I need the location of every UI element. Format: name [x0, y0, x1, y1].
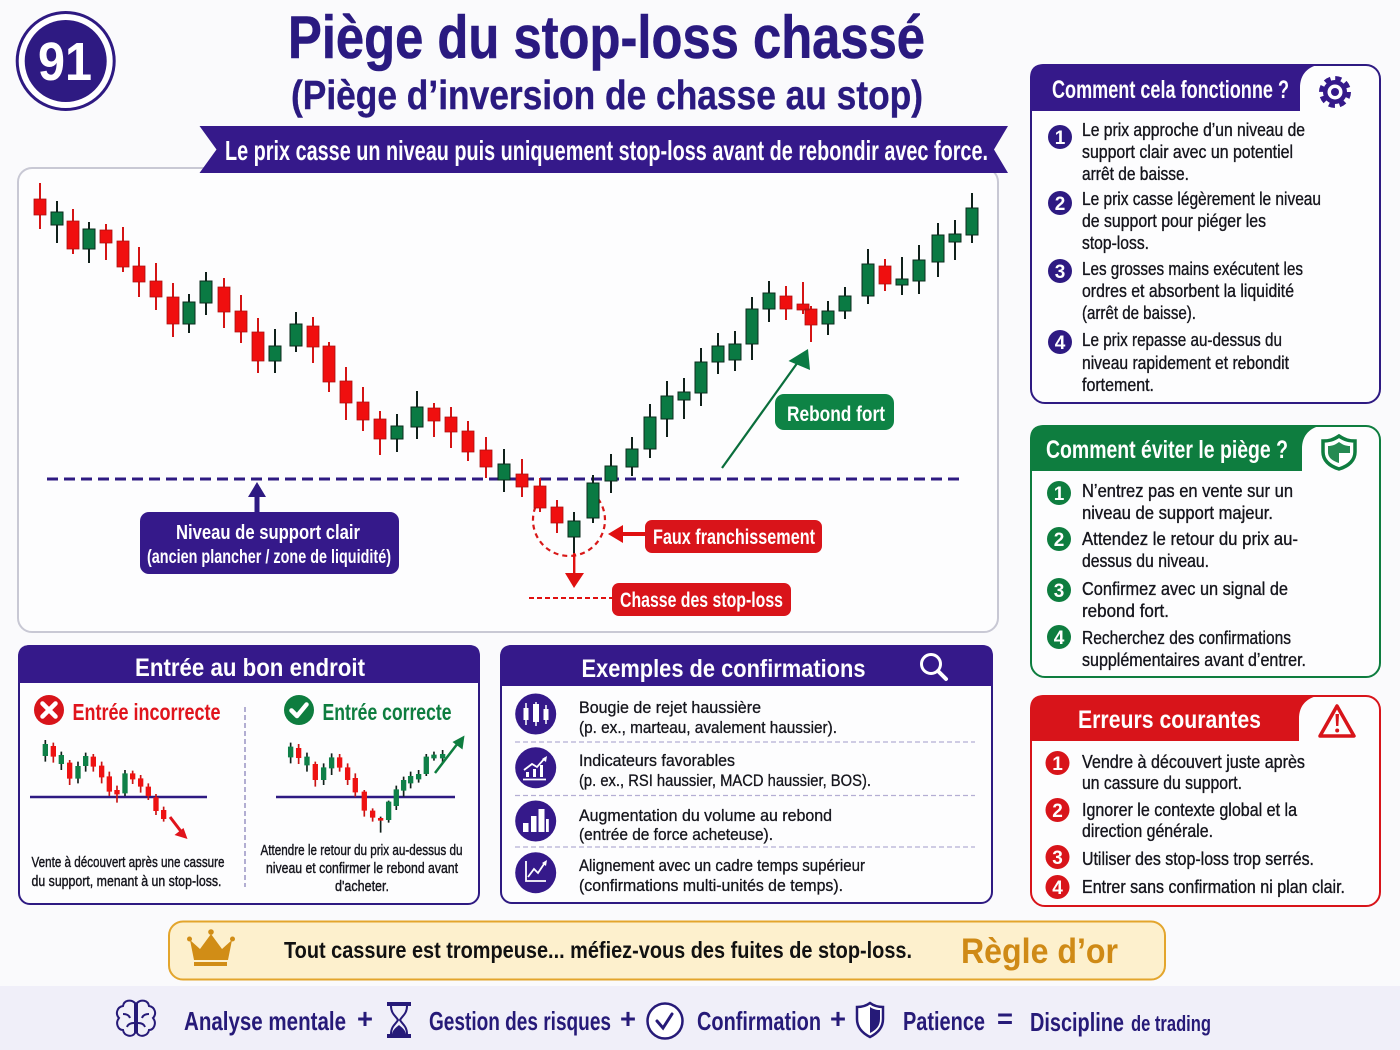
icon: check — [284, 695, 314, 725]
step 1: arrêt de baisse. — [1082, 164, 1189, 184]
step 3: 3 — [1055, 262, 1065, 283]
arrow: strong rebound — [722, 349, 810, 468]
step 1: 1 — [1055, 128, 1066, 149]
panel: how it works — [1030, 64, 1380, 403]
icon: crown — [187, 929, 235, 966]
mistake 2 — [1046, 798, 1298, 841]
step 2: Le prix casse légèrement le niveau — [1082, 189, 1321, 209]
row: indicators — [515, 747, 871, 790]
mistake 2: direction générale. — [1082, 821, 1213, 841]
step 4: Recherchez des confirmations — [1082, 628, 1291, 648]
step 2 — [1048, 189, 1321, 253]
step 2: stop-loss. — [1082, 233, 1149, 253]
icon: check circle — [648, 1004, 682, 1038]
label: support level: (ancien plancher / zone de liquidité) — [147, 547, 391, 568]
step 1: support clair avec un potentiel — [1082, 142, 1293, 162]
row: rejection candle — [515, 694, 837, 737]
text: confirmation: Confirmation — [697, 1006, 821, 1036]
mistake 1: un cassure du support. — [1082, 773, 1242, 793]
label: stop hunt: Chasse des stop-loss — [620, 589, 783, 612]
heading: Entrée au bon endroit — [135, 654, 366, 682]
label: strong rebound — [775, 394, 894, 430]
step 1: 1 — [1054, 484, 1065, 505]
subtitle ribbon — [200, 126, 1008, 173]
panel: candlestick chart — [18, 168, 998, 632]
wrong entry caption: du support, menant à un stop-loss. — [32, 873, 222, 890]
step 3: Confirmez avec un signal de — [1082, 579, 1288, 599]
label: stop hunt — [612, 583, 791, 616]
badge: number 91: 91 — [38, 32, 92, 92]
correct entry caption — [260, 842, 462, 895]
header — [18, 645, 480, 683]
text: risk management: Gestion des risques — [429, 1006, 611, 1036]
arrow: false breakout pointer — [608, 525, 645, 543]
label: false breakout — [645, 520, 822, 553]
row: volume: Augmentation du volume au rebond — [579, 807, 832, 825]
plus: + — [620, 1003, 636, 1034]
step 1: niveau de support majeur. — [1082, 503, 1273, 523]
step 1 — [1048, 120, 1305, 184]
badge: number 91 — [17, 12, 114, 110]
golden rule text: Tout cassure est trompeuse... méfiez-vous des fuites de stop-loss. — [284, 937, 912, 963]
correct entry caption: d'acheter. — [335, 878, 389, 895]
mistake 3: 3 — [1052, 848, 1063, 869]
heading: Erreurs courantes — [1078, 706, 1261, 734]
heading: Exemples de confirmations — [582, 655, 866, 683]
golden rule title: Règle d’or — [961, 932, 1118, 971]
icon: cross — [34, 695, 64, 725]
text: mental analysis: Analyse mentale — [184, 1006, 346, 1036]
wrong entry caption: Vente à découvert après une cassure — [32, 854, 224, 871]
mini chart: wrong entry — [30, 740, 207, 839]
panel: right entry — [18, 645, 480, 904]
step 3 — [1048, 259, 1303, 323]
step 3: (arrêt de baisse). — [1082, 303, 1196, 323]
subtitle ribbon: Le prix casse un niveau puis uniquement stop-loss avant de rebondir avec force. — [225, 135, 988, 166]
mistake 4: Entrer sans confirmation ni plan clair. — [1082, 877, 1345, 897]
support dashed line — [47, 478, 960, 480]
label: support level: Niveau de support clair — [176, 522, 360, 544]
step 3: Les grosses mains exécutent les — [1082, 259, 1303, 279]
icon: magnifier — [922, 654, 946, 679]
mini chart: correct entry — [276, 736, 464, 833]
red dashed stop-loss level — [529, 597, 612, 599]
row: rejection candle: Bougie de rejet haussière — [579, 699, 761, 717]
header tab — [1030, 425, 1324, 471]
icon: warning triangle — [1320, 706, 1354, 736]
step 2: Attendez le retour du prix au- — [1082, 529, 1298, 549]
row: volume — [515, 800, 832, 844]
correct entry caption: Attendre le retour du prix au-dessus du — [260, 842, 462, 859]
icon: hourglass — [387, 1002, 411, 1038]
panel: confirmation examples — [500, 645, 993, 903]
bottom formula band — [0, 986, 1400, 1050]
mistake 2: Ignorer le contexte global et la — [1082, 800, 1298, 820]
row: higher timeframe — [515, 852, 865, 895]
mistake 4: 4 — [1052, 878, 1063, 899]
red candlesticks — [34, 183, 891, 533]
icon: brain — [117, 1001, 155, 1036]
wrong entry caption — [32, 854, 224, 890]
step 4: 4 — [1054, 628, 1065, 649]
step 1 — [1047, 481, 1293, 523]
mistake 1: Vendre à découvert juste après — [1082, 752, 1305, 772]
header tab — [1030, 64, 1322, 111]
plus: + — [830, 1003, 846, 1034]
row: indicators: Indicateurs favorables — [579, 752, 735, 770]
golden rule banner — [169, 922, 1165, 980]
step 3: ordres et absorbent la liquidité — [1082, 281, 1294, 301]
mistake 3: Utiliser des stop-loss trop serrés. — [1082, 849, 1314, 869]
wrong entry heading: Entrée incorrecte — [72, 699, 220, 725]
row: indicators: (p. ex., RSI haussier, MACD haussier, BOS). — [579, 772, 871, 790]
mistake 3 — [1046, 845, 1314, 869]
step 2 — [1047, 527, 1298, 571]
step 1: Le prix approche d’un niveau de — [1082, 120, 1305, 140]
mistake 4 — [1046, 875, 1345, 899]
step 4: supplémentaires avant d’entrer. — [1082, 650, 1306, 670]
icon: shield — [857, 1003, 883, 1037]
equals: = — [997, 1003, 1013, 1034]
title: Piège du stop-loss chassé — [288, 4, 925, 71]
dashed circle: stop hunt zone — [533, 497, 605, 556]
mistake 1 — [1046, 751, 1305, 793]
arrow: up — [435, 736, 464, 773]
text: trading discipline: Discipline — [1030, 1007, 1124, 1037]
mistake 1: 1 — [1052, 754, 1063, 775]
step 4: fortement. — [1082, 375, 1154, 395]
arrow: red down to stop level — [565, 553, 584, 588]
step 4 — [1047, 625, 1306, 670]
green candlesticks — [51, 193, 978, 553]
row: higher timeframe: Alignement avec un cadre temps supérieur — [579, 857, 865, 875]
step 2: 2 — [1055, 194, 1065, 215]
plus: + — [357, 1003, 373, 1034]
correct entry caption: niveau et confirmer le rebond avant — [266, 860, 459, 877]
mistake 2: 2 — [1052, 801, 1063, 822]
arrow: down — [170, 817, 188, 839]
step 2: 2 — [1054, 530, 1064, 551]
text: trading discipline: de trading — [1131, 1011, 1211, 1036]
arrow: up to support — [248, 482, 266, 512]
icon: gear — [1322, 78, 1348, 106]
heading: Comment cela fonctionne ? — [1052, 76, 1289, 104]
step 2: de support pour piéger les — [1082, 211, 1266, 231]
row: volume: (entrée de force acheteuse). — [579, 826, 773, 844]
label: strong rebound: Rebond fort — [787, 403, 885, 426]
header — [500, 645, 993, 686]
step 4: 4 — [1055, 333, 1066, 354]
text: trading discipline — [1030, 1007, 1211, 1037]
label: support level — [140, 512, 399, 574]
row: rejection candle: (p. ex., marteau, avalement haussier). — [579, 719, 837, 737]
subtitle: (Piège d’inversion de chasse au stop) — [291, 72, 923, 118]
correct entry heading: Entrée correcte — [322, 699, 452, 725]
panel: how to avoid the trap — [1030, 425, 1380, 677]
label: false breakout: Faux franchissement — [653, 526, 815, 549]
step 3 — [1047, 578, 1288, 621]
heading: Comment éviter le piège ? — [1046, 436, 1288, 464]
step 4: Le prix repasse au-dessus du — [1082, 330, 1282, 350]
header tab — [1030, 695, 1322, 741]
text: patience: Patience — [903, 1006, 985, 1036]
step 4: niveau rapidement et rebondit — [1082, 353, 1289, 373]
step 4 — [1048, 330, 1289, 395]
icon: shield — [1323, 436, 1355, 469]
step 3: rebond fort. — [1082, 601, 1169, 621]
row: higher timeframe: (confirmations multi-unités de temps). — [579, 877, 843, 895]
step 2: dessus du niveau. — [1082, 551, 1209, 571]
panel: common mistakes — [1030, 695, 1380, 906]
step 1: N’entrez pas en vente sur un — [1082, 481, 1293, 501]
step 3: 3 — [1054, 581, 1064, 602]
